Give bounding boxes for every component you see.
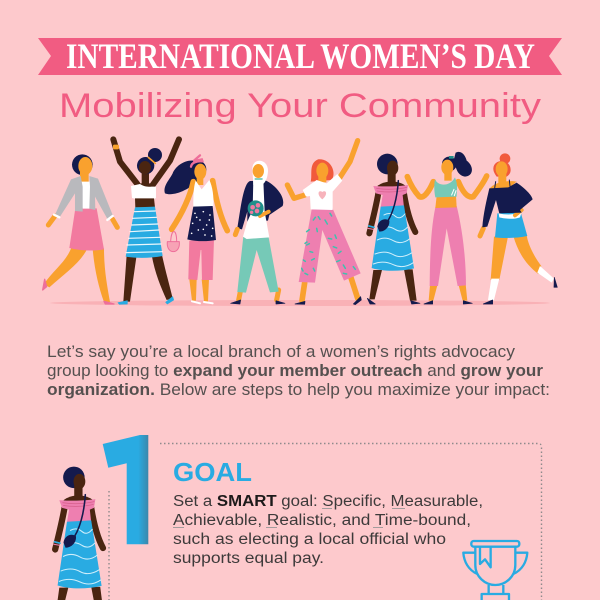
icon: trophy	[463, 541, 527, 600]
woman 2: raised arms, striped blue skirt	[113, 139, 179, 304]
ground shadow	[50, 300, 550, 306]
intro paragraph: Let’s say you’re a local branch of a women’s rights advocacy	[47, 343, 516, 361]
woman 1: grey jacket, pink skirt	[43, 154, 117, 304]
step body text: such as electing a local official who	[173, 531, 446, 548]
woman 6: afro, pink top, blue wave skirt, crossbody bag	[367, 154, 420, 304]
SMART letter underlines	[173, 508, 405, 528]
woman 8: navy off-shoulder top, blue skirt, white socks	[480, 153, 557, 304]
illustration: group of eight women	[43, 139, 557, 306]
intro paragraph: organization. Below are steps to help you maximize your impact:	[47, 381, 550, 399]
banner ribbon	[38, 37, 562, 77]
intro paragraph	[47, 343, 550, 399]
step body text: Set a SMART goal: Specific, Measurable,	[173, 493, 483, 510]
intro paragraph: group looking to expand your member outreach and grow your	[47, 362, 544, 380]
woman 3: navy dotted skirt, pink trousers, handbag	[165, 155, 227, 303]
step heading: GOAL	[173, 459, 252, 487]
step body text: Achievable, Realistic, and Time-bound,	[173, 512, 471, 529]
step body text	[173, 493, 483, 567]
step figure: woman with crossbody bag	[53, 467, 108, 600]
step number 1	[103, 435, 148, 544]
step body text: supports equal pay.	[173, 550, 324, 567]
subtitle: Mobilizing Your Community	[59, 87, 541, 125]
woman 4: white hijab, navy jacket, mint trousers, bouquet	[231, 161, 285, 304]
woman 7: teal sports top, pink leggings, ponytail	[407, 152, 487, 304]
step 1 dotted frame	[109, 444, 542, 600]
woman 5: heart tee, patterned trousers	[287, 141, 361, 305]
banner title: INTERNATIONAL WOMEN’S DAY	[66, 37, 535, 77]
